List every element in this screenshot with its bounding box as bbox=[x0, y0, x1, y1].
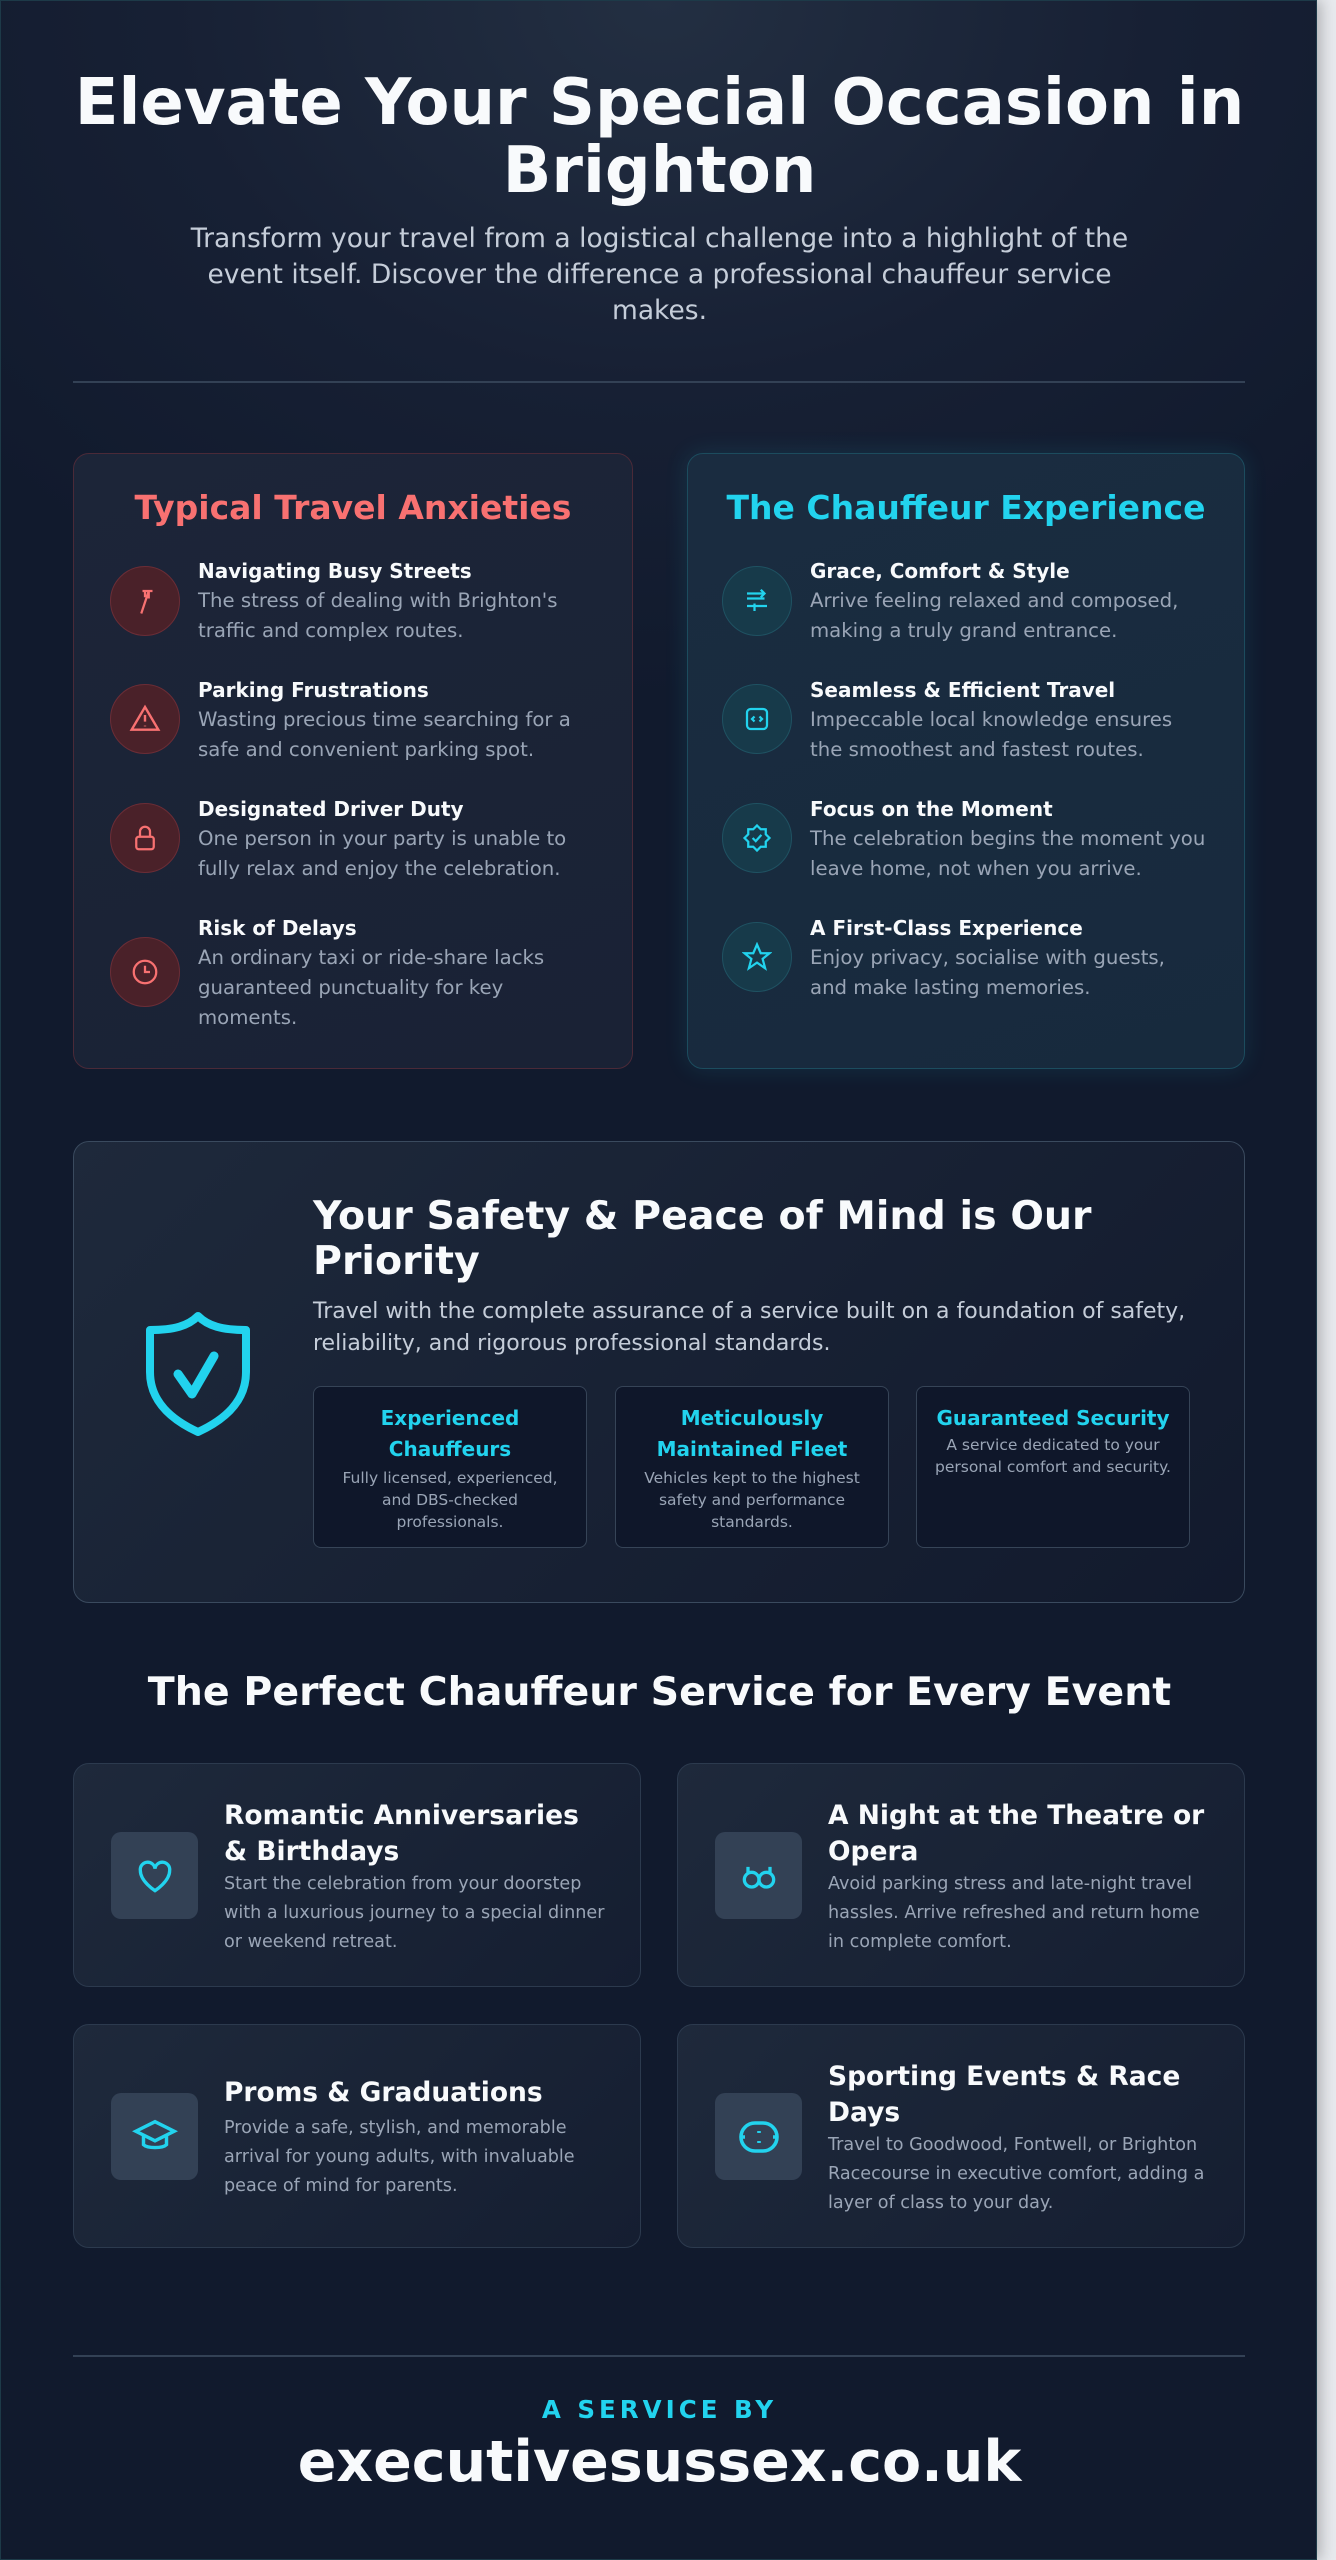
card: theatre: in complete comfort. bbox=[828, 1932, 1012, 1952]
card: theatre bbox=[677, 1763, 1245, 1987]
subtitle: event itself. Discover the difference a professional chauffeur service bbox=[207, 259, 1112, 290]
subtitle bbox=[190, 223, 1128, 326]
item: grace: Grace, Comfort & Style bbox=[810, 559, 1070, 583]
card: sporting bbox=[677, 2024, 1245, 2248]
card: theatre: A Night at the Theatre or bbox=[828, 1800, 1204, 1831]
icon: shield bbox=[146, 1312, 250, 1436]
card: theatre: Avoid parking stress and late-night travel bbox=[828, 1874, 1192, 1894]
item: delays: moments. bbox=[198, 1006, 297, 1029]
card: proms bbox=[73, 2024, 641, 2248]
item: focus: leave home, not when you arrive. bbox=[810, 857, 1142, 880]
box: security: Guaranteed Security bbox=[936, 1406, 1170, 1430]
card: anniversaries bbox=[73, 1763, 641, 1987]
card: proms: Provide a safe, stylish, and memorable bbox=[224, 2118, 567, 2138]
box: fleet: Meticulously bbox=[681, 1406, 823, 1430]
item: first-class: A First-Class Experience bbox=[810, 916, 1083, 940]
card: sporting: Sporting Events & Race bbox=[828, 2061, 1180, 2092]
title bbox=[75, 66, 1244, 208]
card: proms: arrival for young adults, with invaluable bbox=[224, 2147, 575, 2167]
item: streets: The stress of dealing with Brighton's bbox=[198, 589, 557, 612]
card: sporting: Travel to Goodwood, Fontwell, or Brighton bbox=[828, 2135, 1197, 2155]
panel: anxieties bbox=[73, 453, 633, 1069]
item: grace: making a truly grand entrance. bbox=[810, 619, 1117, 642]
card: theatre: Opera bbox=[828, 1836, 918, 1867]
card: sporting: Days bbox=[828, 2097, 900, 2128]
box: security: A service dedicated to your bbox=[946, 1436, 1160, 1454]
heading: safety bbox=[312, 1193, 1092, 1284]
box: fleet: standards. bbox=[711, 1513, 793, 1531]
subtitle: Transform your travel from a logistical challenge into a highlight of the bbox=[191, 223, 1128, 254]
item: first-class: and make lasting memories. bbox=[810, 976, 1091, 999]
item: parking: Parking Frustrations bbox=[198, 678, 429, 702]
card: theatre: hassles. Arrive refreshed and return home bbox=[828, 1903, 1200, 1923]
item: streets: Navigating Busy Streets bbox=[198, 559, 472, 583]
heading: experience: The Chauffeur Experience bbox=[727, 488, 1205, 527]
footer brand: executivesussex.co.uk bbox=[298, 2429, 1021, 2495]
box: chauffeurs: Chauffeurs bbox=[389, 1437, 511, 1461]
box: security bbox=[916, 1386, 1190, 1548]
item: grace: Arrive feeling relaxed and composed, bbox=[810, 589, 1178, 612]
item: delays: guaranteed punctuality for key bbox=[198, 976, 503, 999]
card: anniversaries: or weekend retreat. bbox=[224, 1932, 397, 1952]
card: sporting: Racecourse in executive comfort, adding a bbox=[828, 2164, 1204, 2184]
item: focus bbox=[722, 797, 1205, 880]
heading: safety: Your Safety & Peace of Mind is Our bbox=[313, 1193, 1092, 1239]
item: driver bbox=[110, 797, 566, 880]
box: chauffeurs: and DBS-checked bbox=[382, 1491, 518, 1509]
text: safety intro: Travel with the complete assurance of a service built on a foundation of safety, bbox=[313, 1299, 1185, 1324]
card: anniversaries: & Birthdays bbox=[224, 1836, 399, 1867]
panel: chauffeur experience bbox=[687, 453, 1245, 1069]
box: fleet: Vehicles kept to the highest bbox=[644, 1469, 860, 1487]
box: chauffeurs: Experienced bbox=[381, 1406, 519, 1430]
item: parking: safe and convenient parking spot. bbox=[198, 738, 534, 761]
panel: safety bbox=[73, 1141, 1245, 1603]
box: security: personal comfort and security. bbox=[935, 1458, 1171, 1476]
card: sporting: layer of class to your day. bbox=[828, 2193, 1053, 2213]
item: delays: An ordinary taxi or ride-share lacks bbox=[198, 946, 544, 969]
card: anniversaries: Start the celebration from your doorstep bbox=[224, 1874, 581, 1894]
text: safety intro: reliability, and rigorous professional standards. bbox=[313, 1331, 830, 1356]
heading: anxieties: Typical Travel Anxieties bbox=[135, 488, 571, 527]
item: parking: Wasting precious time searching for a bbox=[198, 708, 571, 731]
box: fleet: Maintained Fleet bbox=[657, 1437, 847, 1461]
card: anniversaries: with a luxurious journey to a special dinner bbox=[224, 1903, 604, 1923]
item: streets bbox=[110, 559, 557, 642]
title: Brighton bbox=[503, 134, 816, 208]
box: chauffeurs: professionals. bbox=[397, 1513, 503, 1531]
item: seamless bbox=[722, 678, 1172, 761]
item: driver: One person in your party is unable to bbox=[198, 827, 566, 850]
item: seamless: Impeccable local knowledge ensures bbox=[810, 708, 1172, 731]
item: driver: Designated Driver Duty bbox=[198, 797, 464, 821]
item: focus: The celebration begins the moment you bbox=[810, 827, 1205, 850]
box: fleet: safety and performance bbox=[659, 1491, 845, 1509]
item: driver: fully relax and enjoy the celebration. bbox=[198, 857, 560, 880]
item: first-class: Enjoy privacy, socialise with guests, bbox=[810, 946, 1165, 969]
box: chauffeurs: Fully licensed, experienced, bbox=[342, 1469, 558, 1487]
item: parking bbox=[110, 678, 571, 761]
text: safety intro bbox=[312, 1299, 1185, 1356]
item: streets: traffic and complex routes. bbox=[198, 619, 464, 642]
item: first-class bbox=[722, 916, 1165, 999]
title: Elevate Your Special Occasion in bbox=[75, 66, 1244, 140]
card: proms: Proms & Graduations bbox=[224, 2077, 543, 2108]
subtitle: makes. bbox=[612, 295, 707, 326]
item: delays bbox=[110, 916, 544, 1029]
box: chauffeurs bbox=[313, 1386, 587, 1548]
item: focus: Focus on the Moment bbox=[810, 797, 1053, 821]
card: proms: peace of mind for parents. bbox=[224, 2176, 458, 2196]
box: fleet bbox=[615, 1386, 889, 1548]
item: grace bbox=[722, 559, 1178, 642]
item: seamless: the smoothest and fastest routes. bbox=[810, 738, 1144, 761]
item: delays: Risk of Delays bbox=[198, 916, 357, 940]
heading: safety: Priority bbox=[313, 1238, 480, 1284]
card: anniversaries: Romantic Anniversaries bbox=[224, 1800, 579, 1831]
footer label: A SERVICE BY bbox=[542, 2395, 777, 2424]
item: seamless: Seamless & Efficient Travel bbox=[810, 678, 1115, 702]
heading: events: The Perfect Chauffeur Service for Every Event bbox=[148, 1669, 1171, 1715]
